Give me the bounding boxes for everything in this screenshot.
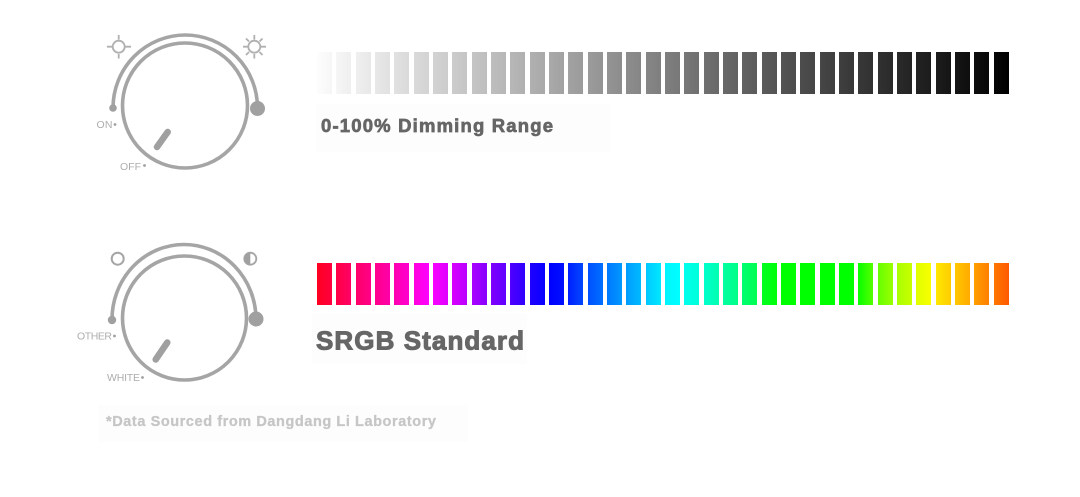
label dot: ON [114, 123, 116, 126]
icon: bright sun [243, 35, 266, 58]
footnote: *Data Sourced from Dangdang Li Laboratory [106, 414, 436, 430]
arc start dot [109, 104, 117, 112]
heading: SRGB standard: SRGB Standard [316, 326, 524, 356]
rainbow sRGB bar strip [317, 263, 1009, 305]
label dot: WHITE [141, 376, 144, 379]
label: OTHER: OTHER [77, 330, 112, 342]
heading: dimming range: 0-100% Dimming Range [321, 115, 553, 136]
knob pointer [156, 342, 167, 360]
label: OFF: OFF [120, 161, 141, 173]
outer arc [112, 244, 256, 320]
dial: brightness [107, 35, 266, 168]
dial ring [122, 256, 246, 380]
arc end dot [248, 312, 264, 326]
arc start dot [108, 316, 116, 324]
icon: dim sun [107, 35, 131, 58]
label: WHITE: WHITE [107, 372, 140, 384]
arc end dot [250, 101, 265, 116]
icon: half circle [244, 253, 256, 265]
label: ON: ON [96, 119, 112, 131]
outer arc [113, 35, 258, 108]
knob pointer [157, 132, 168, 147]
dial: colour mode [108, 244, 264, 380]
label dot: OTHER [113, 335, 116, 337]
dial ring [122, 43, 248, 168]
icon: open circle [112, 253, 124, 265]
label dot: OFF [143, 164, 146, 167]
grayscale dimming bar strip [330, 52, 1009, 94]
